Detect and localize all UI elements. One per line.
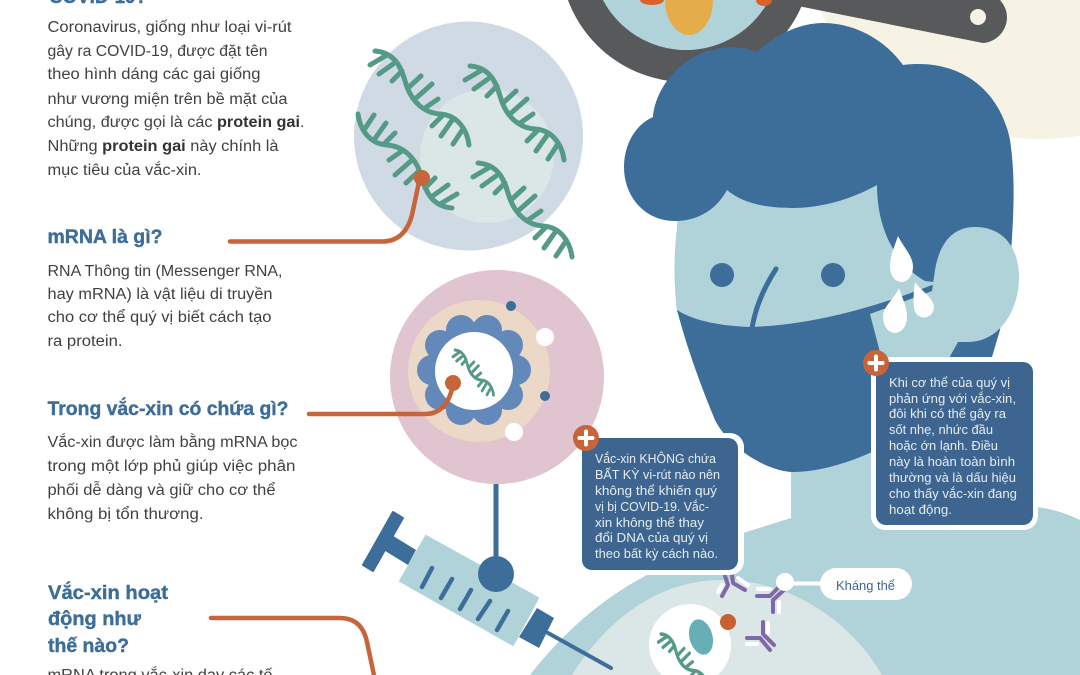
callout card: vaccine contains no virus: xin không thể thay: [595, 515, 705, 530]
text block: mRNA: cho cơ thể quý vị biết cách tạo: [48, 309, 272, 326]
connector: vaccine content to particle circle: [309, 375, 461, 414]
text block: mRNA: [48, 263, 282, 350]
face mask: [677, 285, 1008, 472]
face: [674, 100, 940, 345]
icon: syringe: [363, 484, 611, 668]
label: antibodies callout: Kháng thể: [836, 578, 895, 593]
callout card: side effects: hoạt động.: [889, 502, 952, 517]
callout card: vaccine contains no virus: BẤT KỲ vi-rút nào nên: [595, 467, 720, 482]
hand: [870, 227, 1019, 360]
text block: coronavirus: [48, 19, 304, 179]
text block: coronavirus: như vương miện trên bề mặt của: [48, 91, 288, 108]
text block: coronavirus: gây ra COVID-19, được đặt tên: [48, 43, 268, 60]
callout card: side effects: sốt nhẹ, nhức đầu: [889, 422, 993, 437]
text block: mRNA: ra protein.: [48, 333, 122, 350]
connector: how it works: [211, 618, 375, 675]
callout card: side effects: cho thấy vắc-xin đang: [889, 486, 1017, 501]
panel: spike protein circle: [354, 22, 583, 257]
icon: plus badge 1: [573, 425, 599, 451]
callout card: side effects: phản ứng với vắc-xin,: [889, 391, 1016, 406]
text block: coronavirus: Coronavirus, giống như loại vi-rút: [48, 19, 292, 36]
text block: vaccine contents: Vắc-xin được làm bằng mRNA bọc: [48, 434, 298, 451]
icon: plus badge 2: [863, 350, 889, 376]
text block: coronavirus: Những protein gai này chính là: [48, 138, 279, 155]
text block: coronavirus: chúng, được gọi là các protein gai.: [48, 114, 304, 131]
text block: vaccine contents: phối dễ dàng và giữ cho cơ thể: [48, 482, 276, 499]
eyes: [710, 263, 845, 287]
heading: what is mRNA: mRNA là gì?: [48, 226, 162, 248]
callout card: vaccine contains no virus: đổi DNA của quý vị: [595, 530, 708, 545]
text block: coronavirus: mục tiêu của vắc-xin.: [48, 162, 202, 179]
heading: how the vaccine works: động như: [48, 608, 142, 630]
lipid shell: [417, 315, 531, 425]
heading: how the vaccine works: Vắc-xin hoạt: [48, 580, 169, 604]
cell background: [572, 580, 882, 675]
text block: mRNA: hay mRNA) là vật liệu di truyền: [48, 286, 272, 303]
hair: [624, 23, 1014, 290]
callout card: vaccine contains no virus: vị bị COVID-19. Vắc-: [595, 499, 709, 514]
callout card: vaccine contains no virus: không thể khiến quý: [595, 483, 718, 498]
cell nucleus: [649, 604, 731, 675]
callout card: vaccine contains no virus: Vắc-xin KHÔNG chứa: [595, 451, 717, 466]
text block: vaccine contents: trong một lớp phủ giúp việc phân: [48, 458, 296, 475]
nose: [752, 269, 776, 328]
label: antibodies callout: [776, 568, 912, 600]
heading: how the vaccine works: thế nào?: [48, 635, 129, 657]
callout card: side effects: Khi cơ thể của quý vị: [889, 375, 1010, 390]
callout card: side effects: [871, 357, 1038, 530]
body and neck: [530, 400, 1080, 675]
connector: mRNA to spike circle: [230, 170, 430, 242]
text block: mRNA: RNA Thông tin (Messenger RNA,: [48, 263, 282, 280]
icon: magnifying glass: [560, 0, 1007, 82]
text block: vaccine contents: [48, 434, 298, 523]
panel: vaccine particle circle: [390, 270, 604, 484]
callout card: side effects: này là hoàn toàn bình: [889, 454, 1015, 469]
antibodies: [718, 575, 785, 650]
text block: vaccine contents: không bị tổn thương.: [48, 506, 204, 523]
callout card: side effects: thường và là dấu hiệu: [889, 470, 1016, 485]
callout card: side effects: đôi khi có thể gây ra: [889, 406, 1007, 421]
heading: how the vaccine works: [48, 580, 169, 657]
text block: coronavirus: theo hình dáng các gai giống: [48, 66, 260, 83]
cell close-up in the arm: [572, 580, 882, 675]
callout card: side effects: hoặc ớn lạnh. Điều: [889, 438, 998, 453]
person illustration: [530, 23, 1080, 675]
callout card: vaccine contains no virus: [577, 433, 744, 575]
icon: sweat drops: [883, 236, 934, 333]
callout card: vaccine contains no virus: theo bất kỳ cách nào.: [595, 546, 718, 561]
heading: what is in the vaccine: Trong vắc-xin có chứa gì?: [48, 396, 288, 420]
background cream circle: [795, 0, 1080, 139]
